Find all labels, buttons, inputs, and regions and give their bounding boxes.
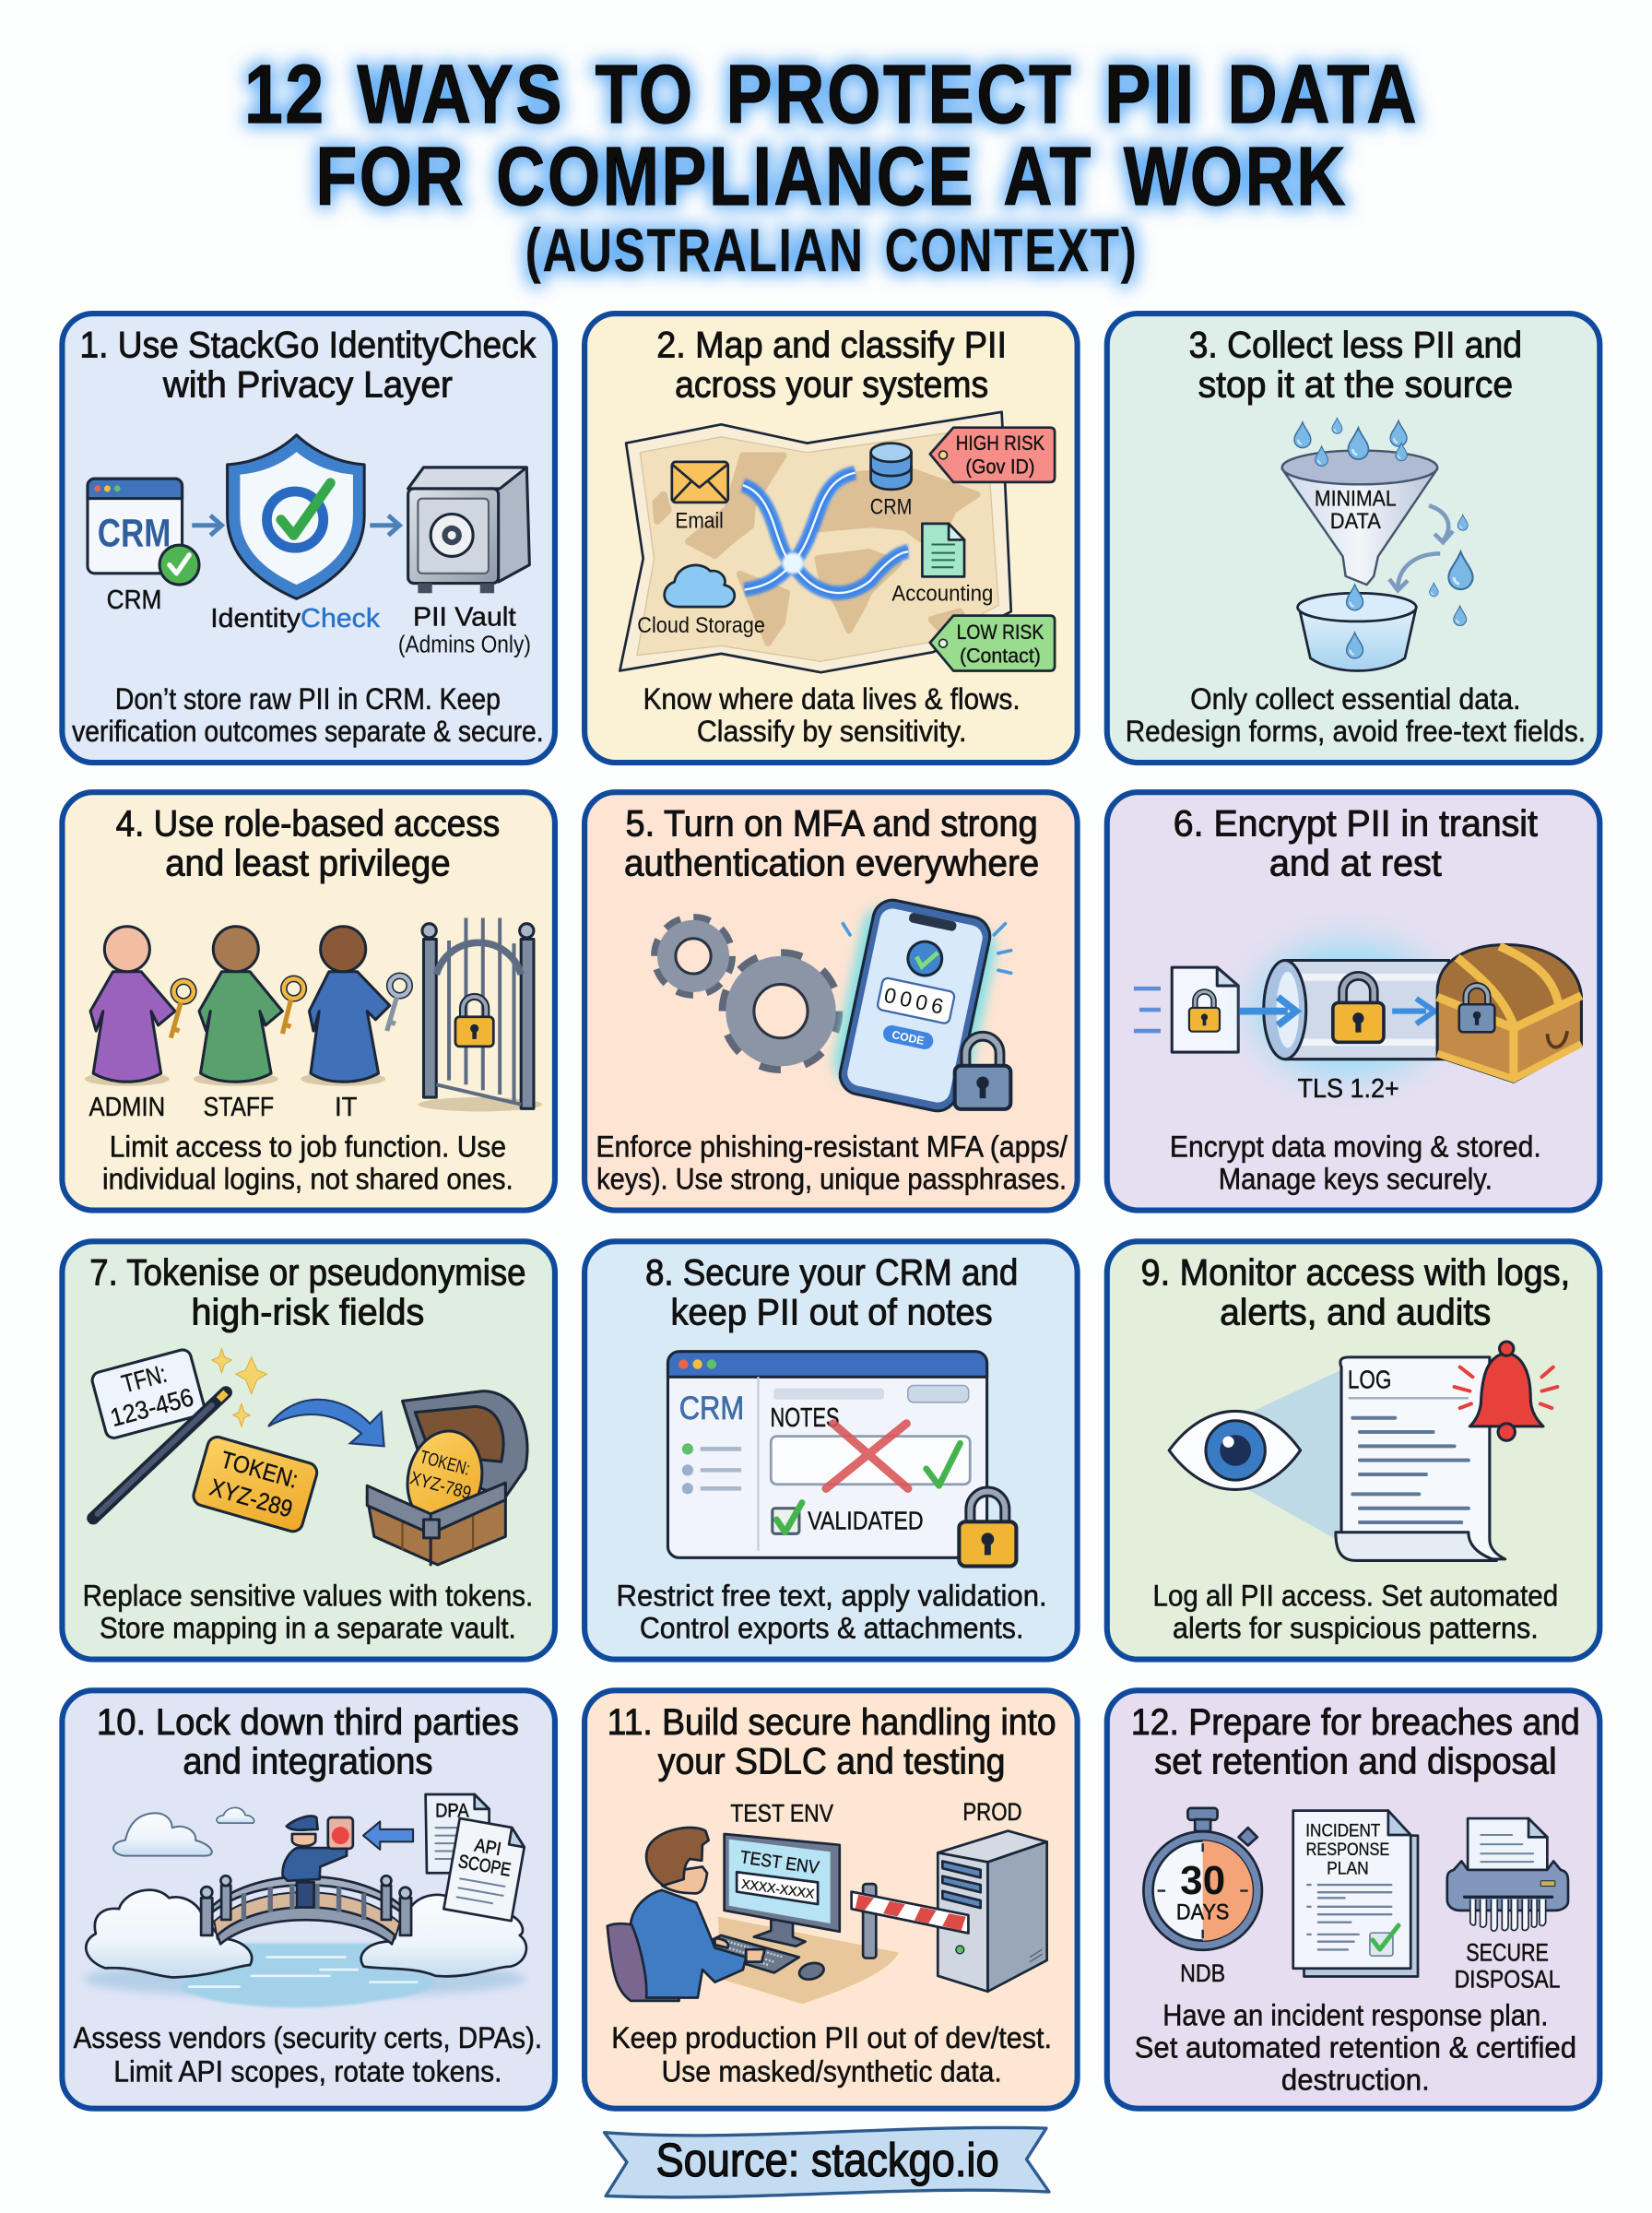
- figure: staff: STAFF: [204, 1093, 274, 1122]
- arrow: CRM to shield: [192, 515, 221, 535]
- icon: TFN card: 123-456: [107, 1382, 196, 1432]
- icon: PII vault safe: (Admins Only): [398, 631, 531, 658]
- illustration: funnel and cup: [1282, 418, 1473, 671]
- icon: CRM window: CRM: [107, 586, 161, 615]
- heading: [608, 1702, 1056, 1782]
- heading: and least privilege: [165, 844, 451, 884]
- panel: 8 Secure CRM: [584, 1241, 1078, 1660]
- barrier post: [863, 1884, 876, 1959]
- heading: with Privacy Layer: [162, 364, 453, 405]
- icon: eye: [1169, 1411, 1301, 1489]
- source banner: Source: stackgo.io: [655, 2134, 999, 2186]
- caption: Store mapping in a separate vault.: [100, 1612, 516, 1645]
- figure: admin: [85, 927, 194, 1122]
- arrow: file to tunnel: [1240, 997, 1296, 1025]
- icon: token card: XYZ-289: [206, 1473, 296, 1523]
- icon: incident response plan: INCIDENT: [1305, 1820, 1380, 1840]
- barrier arm: [852, 1892, 968, 1934]
- icon: accounting document: Accounting: [891, 581, 993, 606]
- notes field with cross: [771, 1403, 970, 1488]
- caption: Replace sensitive values with tokens.: [83, 1579, 533, 1612]
- icon: PII vault safe: [398, 467, 531, 658]
- caption: [643, 682, 1021, 748]
- caption: [596, 1130, 1068, 1196]
- heading: 11. Build secure handling into: [608, 1702, 1056, 1743]
- heading: [116, 804, 500, 884]
- panel frame: [62, 1241, 555, 1660]
- icon: token card: [191, 1435, 319, 1533]
- icon: 30 day stopwatch: NDB: [1180, 1959, 1225, 1987]
- continents: [655, 456, 977, 643]
- heading: stop it at the source: [1198, 364, 1513, 405]
- caption: [1153, 1579, 1558, 1645]
- icon: API scope document: API: [473, 1836, 502, 1860]
- heading: high-risk fields: [192, 1293, 424, 1333]
- title: [244, 48, 1419, 284]
- icon: TLS tunnel: [1257, 946, 1448, 1104]
- caption: destruction.: [1281, 2064, 1430, 2097]
- icon: padlock: [955, 1036, 1010, 1109]
- tag: low risk: LOW RISK: [957, 621, 1044, 644]
- icon: CRM window: [88, 479, 199, 615]
- panel frame: [62, 1690, 555, 2109]
- icon: chest with coin: XYZ-789: [408, 1468, 473, 1504]
- heading: 4. Use role-based access: [116, 804, 500, 845]
- caption: Log all PII access. Set automated: [1153, 1579, 1558, 1612]
- server: [938, 1831, 1047, 1992]
- motion lines: [1134, 988, 1161, 1031]
- heading: keep PII out of notes: [671, 1293, 993, 1333]
- heading: [1131, 1702, 1580, 1782]
- caption: Encrypt data moving & stored.: [1170, 1130, 1541, 1163]
- icon: DPA document: [426, 1794, 490, 1873]
- funnel: MINIMAL: [1315, 487, 1397, 511]
- validated check: VALIDATED: [808, 1507, 924, 1535]
- heading: [89, 1253, 526, 1333]
- icon: large gear: [727, 957, 834, 1065]
- icon: API scope document: [443, 1818, 527, 1921]
- heading: [97, 1702, 519, 1782]
- illustration: encrypted transit: [1134, 945, 1581, 1104]
- heading: across your systems: [675, 364, 988, 405]
- panel frame: [584, 314, 1078, 763]
- caption: Don’t store raw PII in CRM. Keep: [115, 682, 501, 716]
- notes field with cross: NOTES: [771, 1403, 840, 1433]
- heading: set retention and disposal: [1154, 1742, 1557, 1782]
- panel frame: [1107, 1241, 1599, 1660]
- browser window: [667, 1352, 987, 1557]
- tag: high risk: (Gov ID): [965, 456, 1034, 479]
- caption: Limit access to job function. Use: [110, 1130, 506, 1163]
- icon: 30 day stopwatch: [1143, 1808, 1262, 1987]
- keyboard and mouse: [712, 1935, 826, 1982]
- icon: email: [672, 462, 728, 534]
- heading: 10. Lock down third parties: [97, 1702, 519, 1743]
- icon: token card: TOKEN:: [218, 1445, 301, 1494]
- panel frame: [584, 1690, 1078, 2109]
- small clouds: [113, 1807, 254, 1856]
- heading: alerts, and audits: [1220, 1293, 1491, 1333]
- figure: staff: [194, 927, 303, 1122]
- panel: 7 Tokenise: [62, 1241, 555, 1660]
- icon: cloud storage: Cloud Storage: [637, 613, 765, 638]
- icon: TFN card: [90, 1348, 206, 1439]
- developer: [608, 1828, 765, 2001]
- label: test env: TEST ENV: [730, 1799, 833, 1827]
- icon: shredder: [1447, 1818, 1568, 1994]
- icon: 30 day stopwatch: 30: [1180, 1858, 1225, 1903]
- validated check: [773, 1503, 924, 1535]
- figure: admin: ADMIN: [89, 1093, 165, 1122]
- caption: [102, 1130, 513, 1196]
- icon: incident response plan: [1293, 1811, 1418, 1977]
- panel frame: [584, 792, 1078, 1211]
- water drops: [1294, 418, 1473, 658]
- icon: phone with code: [828, 894, 1002, 1117]
- arrow to guard: [363, 1821, 413, 1850]
- heading: 5. Turn on MFA and strong: [626, 804, 1038, 845]
- heading: 8. Secure your CRM and: [645, 1253, 1018, 1294]
- icon: IdentityCheck shield: IdentityCheck: [210, 604, 380, 633]
- heading: 2. Map and classify PII: [656, 325, 1007, 365]
- caption: Limit API scopes, rotate tokens.: [113, 2055, 502, 2089]
- icon: CRM window: CRM: [98, 512, 171, 556]
- panel: 11 SDLC: [584, 1690, 1078, 2109]
- icon: log scroll: LOG: [1348, 1366, 1391, 1394]
- panel: 2 Map and classify: [584, 314, 1078, 763]
- panel frame: [1107, 314, 1599, 763]
- caption: Enforce phishing-resistant MFA (apps/: [596, 1130, 1068, 1163]
- heading: 9. Monitor access with logs,: [1141, 1253, 1570, 1294]
- icon: locked file: [1172, 967, 1238, 1052]
- tag: low risk: (Contact): [960, 645, 1041, 668]
- caption: individual logins, not shared ones.: [102, 1163, 513, 1196]
- tag: high risk: [930, 428, 1055, 482]
- right cloud: [361, 1895, 526, 1976]
- caption: Manage keys securely.: [1219, 1163, 1493, 1196]
- illustration: roles and gate: [85, 918, 542, 1122]
- funnel: DATA: [1330, 510, 1381, 534]
- vision beam: [1235, 1370, 1341, 1542]
- panel frame: [1107, 1690, 1599, 2109]
- computer: TEST ENV: [738, 1847, 820, 1878]
- caption: [1135, 1998, 1576, 2097]
- illustration: bridge and guard: [83, 1794, 527, 2007]
- heading: your SDLC and testing: [658, 1742, 1006, 1782]
- caption: keys). Use strong, unique passphrases.: [596, 1163, 1067, 1196]
- icon: CRM database: CRM: [870, 495, 912, 520]
- icon: phone with code: CODE: [891, 1028, 926, 1047]
- illustration: developer and server: [608, 1798, 1047, 2004]
- icon: locked gate: [418, 918, 542, 1111]
- icon: padlock: [959, 1492, 1016, 1567]
- caption: Use masked/synthetic data.: [662, 2055, 1002, 2089]
- funnel: [1282, 451, 1437, 585]
- icon: TFN card: TFN:: [119, 1359, 170, 1398]
- caption: Only collect essential data.: [1190, 682, 1521, 716]
- icon: API scope document: SCOPE: [456, 1852, 513, 1881]
- illustration: timer, plan, shredder: [1143, 1808, 1568, 1994]
- left cloud: [86, 1890, 252, 1978]
- panel: 3 Collect less: [1107, 314, 1599, 763]
- bridge: [201, 1876, 411, 1944]
- flow lines: [743, 473, 908, 593]
- water: [83, 1943, 526, 2007]
- icon: 30 day stopwatch: DAYS: [1176, 1899, 1229, 1924]
- caption: Redesign forms, avoid free-text fields.: [1126, 715, 1586, 748]
- caption: [617, 1579, 1047, 1645]
- tag: low risk: [930, 616, 1055, 670]
- caption: Have an incident response plan.: [1162, 1998, 1548, 2031]
- icon: chest with coin: [367, 1391, 527, 1565]
- caption: Set automated retention & certified: [1135, 2031, 1576, 2065]
- heading: 6. Encrypt PII in transit: [1174, 804, 1538, 845]
- caption: alerts for suspicious patterns.: [1173, 1612, 1539, 1645]
- heading: [80, 325, 536, 405]
- icon: IdentityCheck shield: [210, 435, 380, 633]
- panel frame: [62, 792, 555, 1211]
- icon: incident response plan: RESPONSE: [1306, 1840, 1389, 1860]
- icon: shredder: DISPOSAL: [1455, 1966, 1561, 1994]
- panel: 12 Breach prep: [1107, 1690, 1599, 2109]
- icon: treasure chest: [1437, 945, 1581, 1082]
- caption: verification outcomes separate & secure.: [72, 715, 544, 748]
- icon: magic wand: [93, 1349, 266, 1518]
- desk: [718, 1917, 899, 2004]
- heading: authentication everywhere: [624, 844, 1039, 884]
- caption: Know where data lives & flows.: [643, 682, 1021, 716]
- caption: [1170, 1130, 1541, 1196]
- panel: 4 Role-based access: [62, 792, 555, 1211]
- illustration: gears and phone: [658, 894, 1011, 1117]
- panel frame: [584, 1241, 1078, 1660]
- icon: cloud storage: [637, 565, 765, 638]
- illustration: eye, log, bell: [1169, 1342, 1557, 1560]
- caption: [72, 682, 544, 748]
- icon: shredder: SECURE: [1466, 1939, 1549, 1967]
- computer: XXXX-XXXX: [740, 1877, 816, 1902]
- icon: accounting document: [891, 524, 993, 606]
- heading: [645, 1253, 1018, 1333]
- heading: 12. Prepare for breaches and: [1131, 1702, 1580, 1743]
- title: 12 WAYS TO PROTECT PII DATA: [244, 48, 1419, 141]
- heading: [656, 325, 1007, 405]
- icon: alarm bell: [1455, 1342, 1557, 1440]
- icon: CRM database: [870, 444, 912, 520]
- arrow to chest: [268, 1400, 384, 1446]
- recycling arrows: [1389, 505, 1453, 590]
- heading: 1. Use StackGo IdentityCheck: [80, 325, 536, 365]
- heading: [1174, 804, 1538, 884]
- tag: high risk: HIGH RISK: [956, 432, 1044, 455]
- panel: 9 Monitor: [1107, 1241, 1599, 1660]
- source banner: [605, 2127, 1049, 2197]
- caption: Classify by sensitivity.: [697, 715, 966, 748]
- panel frame: [1107, 792, 1599, 1211]
- icon: log scroll: [1336, 1357, 1505, 1560]
- panel: 5 MFA: [584, 792, 1078, 1211]
- arrow: shield to vault: [370, 515, 399, 535]
- figure: IT: IT: [335, 1093, 358, 1122]
- caption: Restrict free text, apply validation.: [617, 1579, 1047, 1612]
- heading: and integrations: [183, 1742, 432, 1782]
- caption: [1126, 682, 1586, 748]
- heading: and at rest: [1269, 844, 1442, 884]
- signal marks: [843, 924, 1011, 973]
- caption: [611, 2021, 1052, 2089]
- label: prod: PROD: [962, 1798, 1022, 1826]
- panel frame: [62, 314, 555, 763]
- icon: PII vault safe: PII Vault: [413, 602, 516, 632]
- illustration: data map: [620, 412, 1055, 672]
- panel: 6 Encrypt: [1107, 792, 1599, 1211]
- caption: [83, 1579, 533, 1645]
- caption: [74, 2021, 542, 2089]
- heading: [624, 804, 1039, 884]
- computer: [725, 1834, 840, 1947]
- icon: phone with code: 0006: [882, 983, 950, 1020]
- arrow: tunnel to chest: [1392, 999, 1434, 1024]
- figure: guard: [283, 1817, 353, 1907]
- icon: small gear: [658, 921, 728, 991]
- browser window: CRM: [679, 1391, 744, 1426]
- title: (AUSTRALIAN CONTEXT): [525, 216, 1138, 284]
- heading: [1141, 1253, 1570, 1333]
- heading: [1189, 325, 1522, 405]
- icon: email: Email: [675, 509, 724, 534]
- heading: 7. Tokenise or pseudonymise: [89, 1253, 526, 1294]
- map sheet: [620, 412, 1011, 672]
- figure: IT: [301, 927, 409, 1122]
- water cup: [1298, 593, 1416, 671]
- icon: incident response plan: PLAN: [1327, 1859, 1369, 1879]
- panel: 1 StackGo IdentityCheck: [62, 314, 555, 763]
- caption: Keep production PII out of dev/test.: [611, 2021, 1052, 2054]
- illustration: CRM notes window: [667, 1352, 1016, 1567]
- title: FOR COMPLIANCE AT WORK: [315, 130, 1348, 223]
- caption: Assess vendors (security certs, DPAs).: [74, 2021, 542, 2054]
- icon: chest with coin: TOKEN:: [418, 1447, 472, 1480]
- panel: 10 Third parties: [62, 1690, 555, 2109]
- caption: Control exports & attachments.: [640, 1612, 1023, 1645]
- illustration: tokenisation: [90, 1348, 527, 1565]
- icon: TLS tunnel: TLS 1.2+: [1298, 1074, 1399, 1104]
- icon: DPA document: DPA: [435, 1798, 469, 1821]
- heading: 3. Collect less PII and: [1189, 325, 1522, 365]
